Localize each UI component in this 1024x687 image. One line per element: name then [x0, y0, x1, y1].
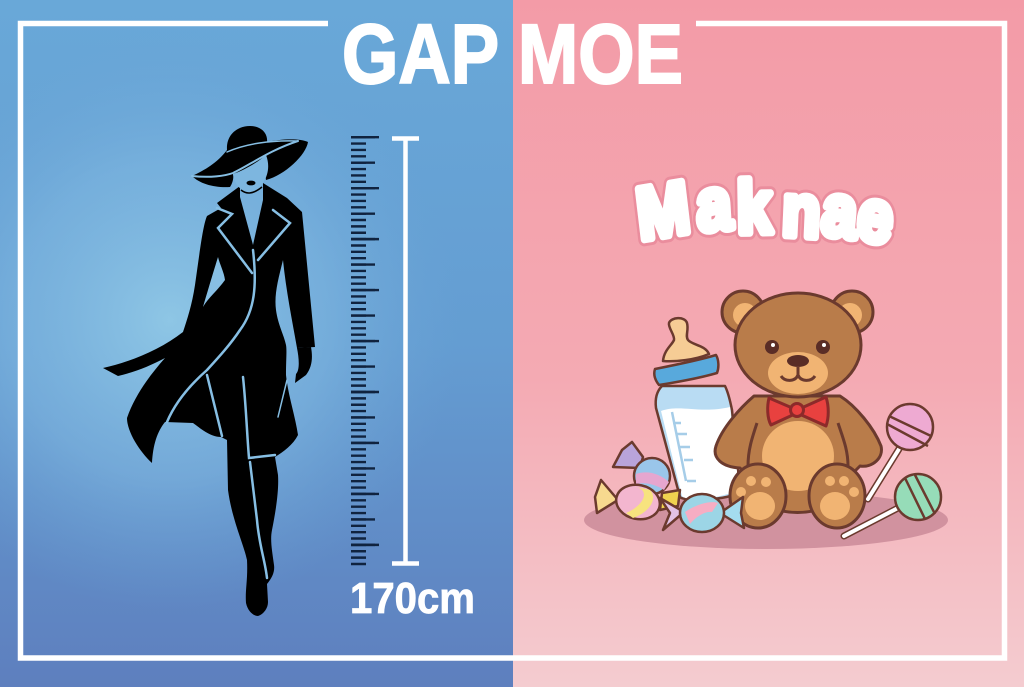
- eyes: [765, 340, 830, 354]
- icon: purple candy: [613, 442, 670, 494]
- icon: teddy bear: [715, 291, 881, 528]
- right inner ear: [838, 303, 862, 327]
- stick: [844, 508, 898, 536]
- bow knot: [790, 404, 804, 416]
- icon: pink lollipop: [868, 404, 933, 499]
- coat and legs: [103, 183, 315, 616]
- height bracket: [392, 138, 419, 564]
- coat highlights: [167, 141, 298, 578]
- head: [735, 293, 861, 397]
- panel: blue background: [0, 0, 513, 687]
- right foot: [809, 464, 865, 528]
- stick core: [844, 508, 898, 536]
- icon: woman silhouette in hat and long coat: [103, 126, 315, 616]
- title: GAP MOE: [342, 7, 683, 101]
- eye shine: [771, 343, 826, 347]
- lips: [246, 181, 256, 185]
- icon: yellow candy: [595, 480, 680, 523]
- icon: green lollipop: [844, 474, 941, 536]
- panel: pink background: [513, 0, 1024, 687]
- height ruler ticks: [358, 136, 365, 566]
- icon: blue candy: [660, 494, 744, 532]
- bow tie: [768, 397, 828, 426]
- stripes: [887, 416, 931, 446]
- heading fill: Maknae: [632, 161, 899, 260]
- arm gap: [203, 257, 225, 307]
- height label: 170cm: [350, 574, 475, 623]
- hat: [192, 126, 308, 187]
- right ear: [831, 291, 873, 333]
- right foot pads: [820, 476, 859, 520]
- icon: baby bottle: [654, 318, 740, 500]
- muzzle: [768, 352, 828, 394]
- left ear: [722, 291, 764, 333]
- smile: [781, 366, 815, 380]
- face: [233, 155, 268, 194]
- chin line: [241, 187, 262, 193]
- arm creases: [748, 423, 848, 466]
- scale marks: [672, 412, 696, 481]
- heading: Maknae: [632, 161, 899, 260]
- left foot pads: [736, 476, 775, 520]
- ground shadow: [584, 491, 948, 549]
- left inner ear: [733, 303, 757, 327]
- stick core: [868, 449, 899, 499]
- body: [715, 396, 881, 512]
- belly: [762, 421, 834, 491]
- left foot: [730, 464, 786, 528]
- stripes: [905, 475, 935, 519]
- collar ring: [654, 355, 718, 385]
- heading outline: Maknae: [632, 161, 899, 260]
- milk: [661, 407, 739, 499]
- nipple: [663, 318, 709, 361]
- hand: [295, 347, 312, 383]
- bottle body: [656, 386, 740, 500]
- candy head: [895, 474, 941, 520]
- stick: [868, 449, 899, 499]
- candy head: [887, 404, 933, 450]
- nose: [787, 355, 809, 367]
